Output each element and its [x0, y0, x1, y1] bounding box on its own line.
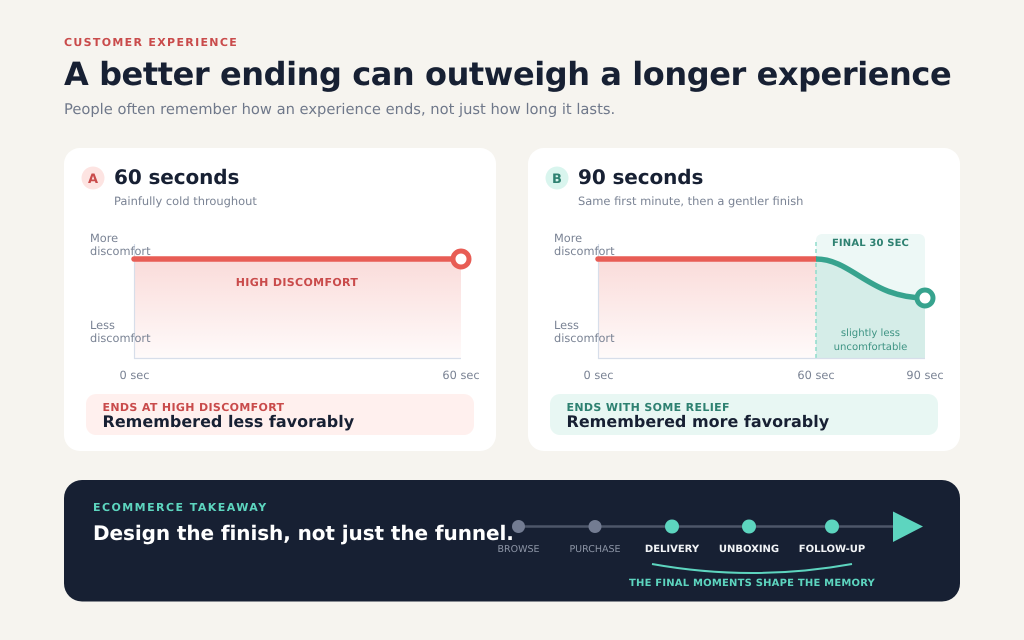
badge B: B — [552, 172, 562, 187]
bracket caption: THE FINAL MOMENTS SHAPE THE MEMORY — [629, 578, 876, 589]
final 30 sec zone — [816, 234, 925, 358]
panel: A 60 seconds — [64, 148, 496, 451]
description A: Painfully cold throughout — [114, 194, 257, 208]
x label 0 A: 0 sec — [120, 368, 149, 382]
badge A — [82, 166, 104, 190]
subtitle: People often remember how an experience ends, not just how long it lasts. — [64, 101, 615, 118]
panel: ecommerce takeaway — [64, 480, 960, 602]
y label less A: Less — [90, 318, 115, 332]
step: unboxing — [719, 520, 779, 555]
end marker A — [453, 251, 469, 267]
step: purchase — [569, 520, 621, 555]
step: unboxing: UNBOXING — [719, 544, 779, 555]
step: delivery: DELIVERY — [645, 544, 700, 555]
callout B: ENDS WITH SOME RELIEF — [566, 401, 730, 414]
chart label A: HIGH DISCOMFORT — [236, 276, 358, 289]
callout A: Remembered less favorably — [102, 412, 355, 431]
y label more A: More — [90, 231, 118, 245]
takeaway label: ECOMMERCE TAKEAWAY — [93, 501, 268, 514]
bracket arc — [652, 564, 852, 573]
y label less B: discomfort — [554, 331, 615, 345]
final 30 sec zone: uncomfortable — [834, 342, 907, 353]
badge B — [546, 166, 568, 190]
final 30 sec zone: FINAL 30 SEC — [832, 238, 909, 249]
chart A — [90, 231, 480, 382]
x label 60 B: 60 sec — [797, 368, 835, 382]
callout B — [550, 394, 938, 435]
heading A: 60 seconds — [114, 165, 239, 189]
relief curve — [816, 259, 925, 298]
x label 0 B: 0 sec — [584, 368, 613, 382]
y label less A: discomfort — [90, 331, 151, 345]
step: delivery — [645, 520, 700, 555]
y label more B: More — [554, 231, 582, 245]
takeaway headline: Design the finish, not just the funnel. — [93, 521, 514, 545]
callout A: ENDS AT HIGH DISCOMFORT — [102, 401, 285, 414]
step: purchase: PURCHASE — [569, 544, 621, 555]
y label less B: Less — [554, 318, 579, 332]
callout B: Remembered more favorably — [566, 412, 830, 431]
line A — [134, 256, 461, 262]
step: follow-up: FOLLOW-UP — [799, 544, 865, 555]
chart B — [554, 231, 944, 382]
panel: B 90 seconds — [528, 148, 960, 451]
callout A — [86, 394, 474, 435]
x label 60 A: 60 sec — [442, 368, 480, 382]
end marker B — [917, 290, 933, 306]
step: browse: BROWSE — [497, 544, 540, 555]
description B: Same first minute, then a gentler finish — [578, 194, 803, 208]
badge A: A — [88, 172, 98, 187]
x label 90 B: 90 sec — [906, 368, 944, 382]
arrowhead — [893, 512, 923, 542]
eyebrow: customer experience: CUSTOMER EXPERIENCE — [64, 36, 238, 49]
y label more A: discomfort — [90, 244, 151, 258]
step: follow-up — [799, 520, 865, 555]
heading B: 90 seconds — [578, 165, 703, 189]
step: browse — [497, 520, 540, 555]
journey timeline — [497, 512, 923, 555]
final 30 sec zone: slightly less — [841, 328, 900, 339]
red line B — [598, 256, 816, 262]
title: A better ending can outweigh a longer experience — [64, 55, 951, 93]
y label more B: discomfort — [554, 244, 615, 258]
